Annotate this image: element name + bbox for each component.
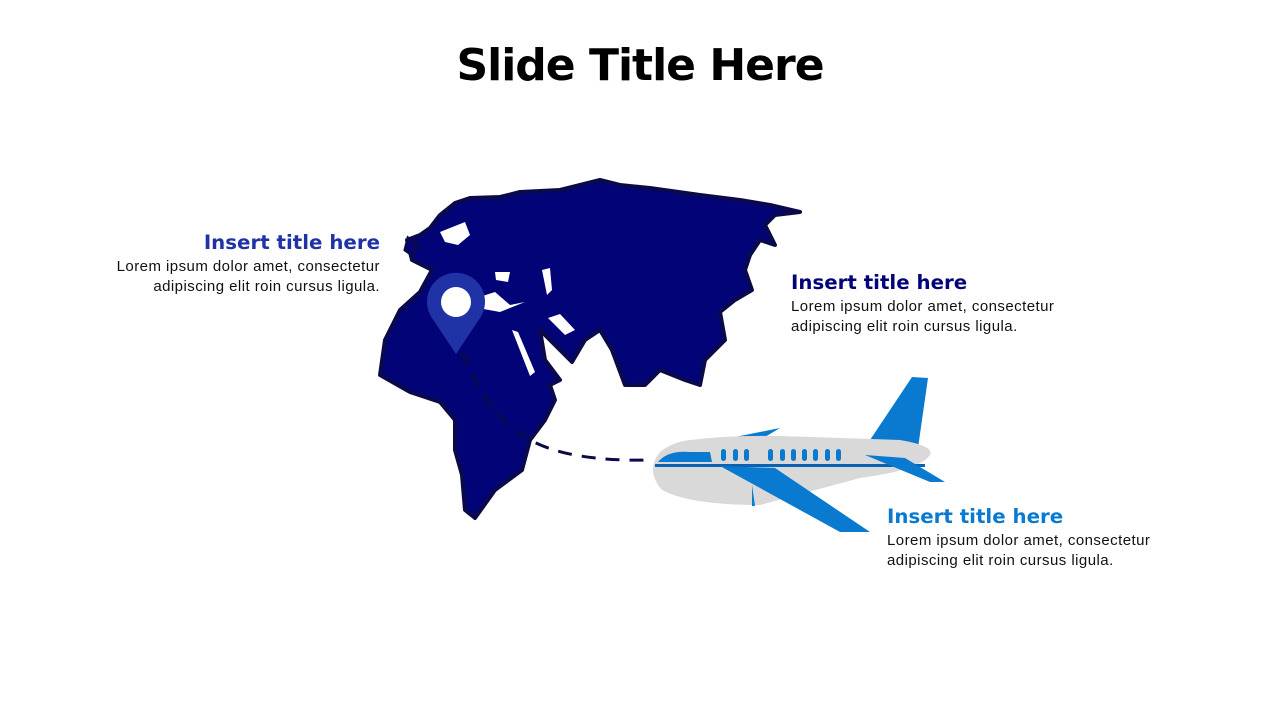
body left: adipiscing elit roin cursus ligula. <box>153 278 380 295</box>
body bottom right: adipiscing elit roin cursus ligula. <box>887 552 1114 569</box>
body left: Lorem ipsum dolor amet, consectetur <box>117 258 380 275</box>
dashed route <box>462 352 652 460</box>
body right top: adipiscing elit roin cursus ligula. <box>791 318 1018 335</box>
icon: location pin <box>427 273 485 354</box>
body bottom right <box>887 532 1150 569</box>
heading bottom right: Insert title here <box>887 505 1063 528</box>
body right top: Lorem ipsum dolor amet, consectetur <box>791 298 1054 315</box>
heading left: Insert title here <box>204 231 380 254</box>
text block: right top <box>791 271 1054 335</box>
title: Slide Title Here <box>456 40 824 91</box>
heading right top: Insert title here <box>791 271 967 294</box>
body left <box>117 258 380 295</box>
text block: left <box>117 231 380 295</box>
text block: bottom right <box>887 505 1150 569</box>
icon: airplane <box>653 377 945 532</box>
map <box>380 180 800 518</box>
body bottom right: Lorem ipsum dolor amet, consectetur <box>887 532 1150 549</box>
body right top <box>791 298 1054 335</box>
